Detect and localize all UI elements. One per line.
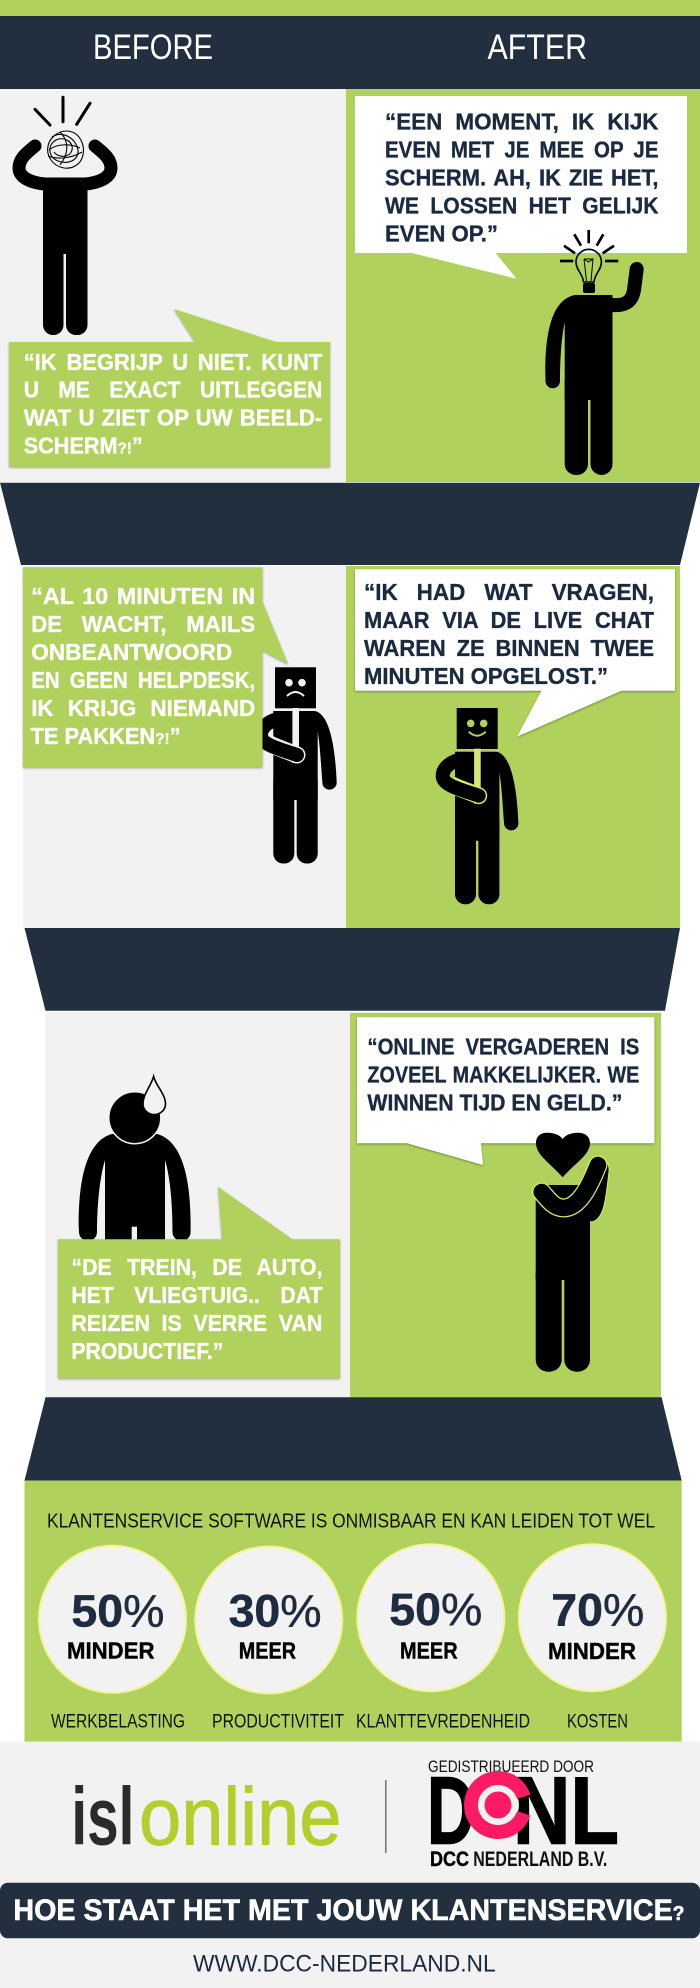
logo: DCC Nederland xyxy=(427,1757,619,1871)
header band: before / after xyxy=(0,16,700,89)
divider band 3 xyxy=(24,1397,682,1480)
speech bubble: before 3: HET VLIEGTUIG.. DAT xyxy=(71,1282,322,1308)
speech bubble: before 2: ONBEANTWOORD xyxy=(31,639,232,665)
speech bubble: after 2: WAREN ZE BINNEN TWEE xyxy=(364,635,654,661)
speech bubble: before 2 xyxy=(23,567,288,767)
panel: after 1 xyxy=(346,89,700,482)
speech bubble: after 1: SCHERM. AH, IK ZIE HET, xyxy=(385,164,658,190)
stat: 50% minder werkbelasting: MINDER xyxy=(67,1637,155,1663)
figure: person with light bulb xyxy=(545,230,637,475)
speech bubble: before 1 xyxy=(9,309,330,467)
speech bubble: before 2: TE PAKKEN?!” xyxy=(30,723,180,749)
logo: DCC Nederland: NEDERLAND B.V. xyxy=(473,1848,607,1871)
stat: 30% meer productiviteit: MEER xyxy=(239,1637,296,1663)
stat: 70% minder kosten: KOSTEN xyxy=(567,1711,628,1732)
speech bubble: after 3: WINNEN TIJD EN GELD.” xyxy=(367,1089,622,1115)
call to action banner xyxy=(0,1883,700,1938)
stat: 30% meer productiviteit: 30% xyxy=(229,1585,322,1636)
divider band 2 xyxy=(24,928,680,1011)
figure: person holding heart xyxy=(536,1133,609,1372)
logo: islonline: isl xyxy=(71,1771,134,1862)
stat: 50% meer klanttevredenheid xyxy=(356,1544,530,1732)
speech bubble: before 2: DE WACHT, MAILS xyxy=(31,611,255,637)
stat: 70% minder kosten: 70% xyxy=(551,1585,644,1636)
website url: WWW.DCC-NEDERLAND.NL xyxy=(193,1951,496,1978)
stat: 30% meer productiviteit: PRODUCTIVITEIT xyxy=(212,1711,344,1732)
panel: before 1 xyxy=(0,89,346,482)
panel: statistics xyxy=(24,1480,682,1742)
speech bubble: after 1: EVEN OP.” xyxy=(385,220,498,246)
figure: confused person xyxy=(19,97,111,335)
panel: before 2 xyxy=(23,566,346,928)
speech bubble: before 2: EN GEEN HELPDESK, xyxy=(31,667,255,693)
logo: DCC Nederland: DCC xyxy=(430,1848,469,1871)
logo: DCC Nederland: D xyxy=(427,1757,475,1864)
speech bubble: before 1: “IK BEGRIJP U NIET. KUNT xyxy=(24,349,322,375)
heading: after: AFTER xyxy=(488,28,587,67)
stat: 50% minder werkbelasting: 50% xyxy=(71,1586,164,1637)
speech bubble: after 1: EVEN MET JE MEE OP JE xyxy=(385,136,658,162)
speech bubble: after 2 xyxy=(355,569,675,737)
speech bubble: before 1: U ME EXACT UITLEGGEN xyxy=(24,376,322,402)
speech bubble: after 3: ZOVEEL MAKKELIJKER. WE xyxy=(367,1061,639,1087)
call to action banner: HOE STAAT HET MET JOUW KLANTENSERVICE? xyxy=(13,1894,684,1927)
stat: 70% minder kosten xyxy=(519,1544,666,1732)
panel: before 3 xyxy=(46,1012,350,1397)
top green strip xyxy=(0,0,700,16)
stat: 70% minder kosten: MINDER xyxy=(548,1638,636,1664)
speech bubble: before 2: IK KRIJG NIEMAND xyxy=(31,695,255,721)
logo divider xyxy=(385,1780,387,1853)
figure: sad person xyxy=(261,667,337,864)
panel: after 3 xyxy=(350,1013,661,1397)
heading: before: BEFORE xyxy=(93,28,213,67)
divider band 1 xyxy=(0,483,700,565)
stat: 30% meer productiviteit xyxy=(195,1546,344,1732)
speech bubble: before 1: WAT U ZIET OP UW BEELD- xyxy=(24,404,322,430)
speech bubble: before 3: “DE TREIN, DE AUTO, xyxy=(71,1254,322,1280)
speech bubble: after 2: MAAR VIA DE LIVE CHAT xyxy=(364,607,654,633)
speech bubble: after 3: “ONLINE VERGADEREN IS xyxy=(367,1033,639,1059)
stat: 50% meer klanttevredenheid: MEER xyxy=(400,1638,458,1664)
logo: DCC Nederland: GEDISTRIBUEERD DOOR xyxy=(428,1757,594,1776)
speech bubble: after 1: “EEN MOMENT, IK KIJK xyxy=(385,108,659,134)
figure: happy person xyxy=(443,708,518,904)
speech bubble: after 2: “IK HAD WAT VRAGEN, xyxy=(364,579,654,605)
logo: DCC Nederland: NL xyxy=(513,1757,619,1864)
logo: islonline: online xyxy=(139,1771,342,1862)
stat: 50% minder werkbelasting xyxy=(39,1546,186,1732)
speech bubble: after 2: MINUTEN OPGELOST.” xyxy=(364,663,608,689)
speech bubble: before 3 xyxy=(58,1187,340,1378)
speech bubble: after 3 xyxy=(357,1017,654,1165)
speech bubble: after 1 xyxy=(355,96,687,279)
stat: 50% meer klanttevredenheid: KLANTTEVREDENHEID xyxy=(356,1711,530,1732)
footer panel xyxy=(0,1742,700,1988)
speech bubble: before 2: “AL 10 MINUTEN IN xyxy=(31,583,255,609)
stat: 50% minder werkbelasting: WERKBELASTING xyxy=(51,1711,185,1732)
speech bubble: before 3: PRODUCTIEF.” xyxy=(71,1338,223,1364)
panel: after 2 xyxy=(346,566,680,928)
speech bubble: before 1: SCHERM?!” xyxy=(24,432,143,458)
stat: 50% meer klanttevredenheid: 50% xyxy=(389,1584,482,1635)
figure: sweating person xyxy=(79,1076,191,1241)
speech bubble: after 1: WE LOSSEN HET GELIJK xyxy=(385,192,659,218)
speech bubble: before 3: REIZEN IS VERRE VAN xyxy=(71,1310,322,1336)
